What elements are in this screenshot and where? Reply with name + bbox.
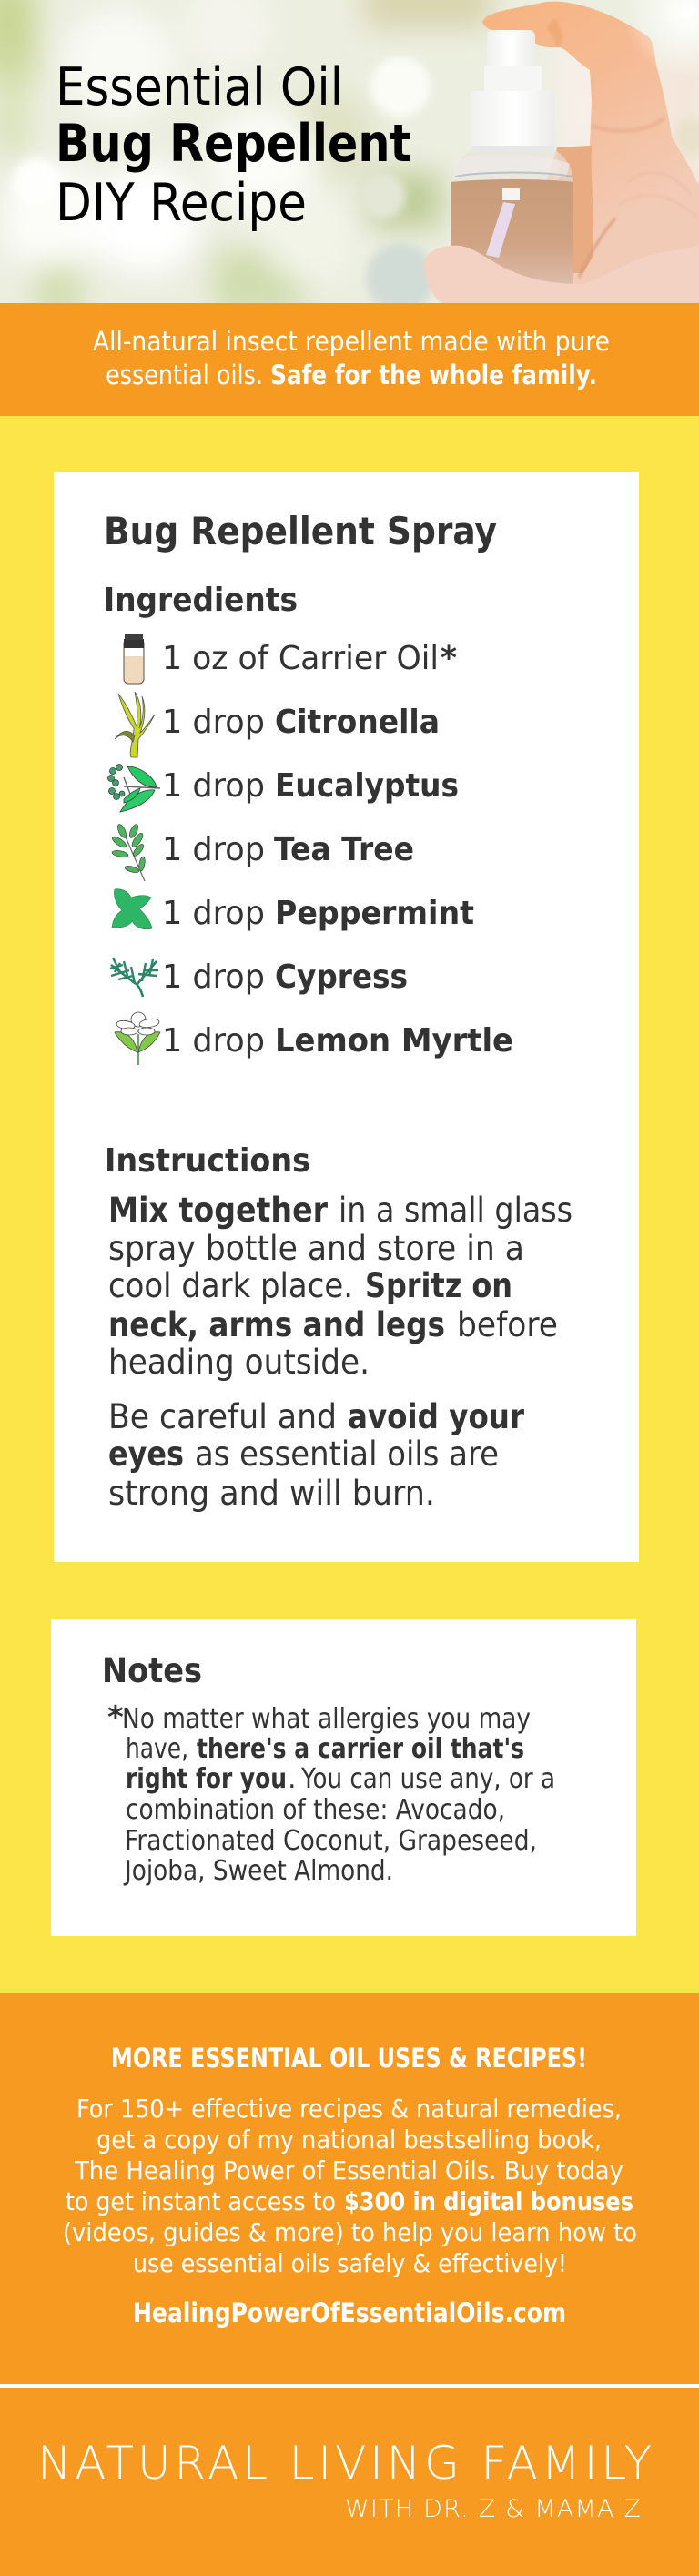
- instructions: mixing paragraph: in a small glass: [339, 1191, 572, 1230]
- footer logo: WITH DR. Z & MAMA Z: [345, 2495, 641, 2523]
- notes body: there's a carrier oil that's: [197, 1733, 524, 1765]
- instructions: mixing paragraph: [108, 1191, 572, 1382]
- instructions: mixing paragraph: before: [457, 1305, 558, 1344]
- ingredient: eucalyptus: 1 drop: [162, 767, 265, 805]
- ingredient: citronella: 1 drop: [162, 704, 265, 741]
- orange intro band: Safe for the whole family.: [270, 360, 597, 390]
- promo body: get a copy of my national bestselling book,: [96, 2125, 602, 2155]
- instructions: mixing paragraph: spray bottle and store in a: [108, 1229, 524, 1268]
- notes body: *: [107, 1699, 124, 1736]
- notes body: combination of these: Avocado,: [126, 1794, 505, 1826]
- icon: tea tree: [111, 823, 146, 881]
- notes body: No matter what allergies you may: [122, 1703, 531, 1735]
- notes body: .: [288, 1763, 297, 1795]
- instructions: mixing paragraph: neck, arms and legs: [108, 1305, 445, 1344]
- promo body: [63, 2094, 637, 2278]
- promo heading: MORE ESSENTIAL OIL USES & RECIPES!: [111, 2043, 587, 2074]
- ingredients heading: Ingredients: [104, 582, 298, 619]
- ingredient: tea tree: Tea Tree: [274, 831, 414, 868]
- instructions: safety paragraph: avoid your: [348, 1397, 525, 1436]
- instructions: mixing paragraph: cool dark place.: [108, 1266, 353, 1305]
- hand behind bottle: [482, 2, 699, 303]
- instructions: safety paragraph: Be careful and: [108, 1397, 337, 1436]
- instructions heading: Instructions: [105, 1142, 310, 1180]
- instructions: safety paragraph: as essential oils are: [195, 1435, 499, 1474]
- ingredient: carrier oil: 1 oz of Carrier Oil: [162, 640, 439, 677]
- instructions: mixing paragraph: Spritz on: [365, 1266, 512, 1305]
- ingredient: eucalyptus: Eucalyptus: [275, 767, 459, 805]
- ingredient: cypress: Cypress: [275, 958, 408, 996]
- instructions: safety paragraph: strong and will burn.: [108, 1474, 435, 1513]
- footer divider: [0, 2384, 699, 2388]
- recipe heading: Bug Repellent Spray: [104, 509, 497, 553]
- footer logo: NATURAL LIVING FAMILY: [37, 2437, 652, 2490]
- orange promo section: [0, 1993, 699, 2576]
- icon: carrier oil bottle: [124, 634, 144, 684]
- title: Essential Oil: [56, 57, 343, 117]
- icon: peppermint: [112, 889, 152, 929]
- thumb: [424, 246, 699, 303]
- ingredient: lemon myrtle: Lemon Myrtle: [275, 1022, 513, 1060]
- instructions: mixing paragraph: heading outside.: [108, 1343, 370, 1382]
- promo body: The Healing Power of Essential Oils. Buy today: [74, 2155, 623, 2186]
- promo body: For 150+ effective recipes & natural remedies,: [76, 2094, 622, 2124]
- hero photo: hand holding spray bottle: [0, 0, 699, 319]
- ingredient: citronella: Citronella: [275, 704, 440, 741]
- icon: citronella: [115, 692, 155, 757]
- notes body: [107, 1699, 555, 1887]
- promo body: use essential oils safely & effectively!: [133, 2248, 567, 2278]
- notes body: You can use any, or a: [300, 1763, 555, 1795]
- notes heading: Notes: [102, 1651, 202, 1690]
- ingredient: peppermint: Peppermint: [275, 895, 474, 932]
- promo body: to get instant access to: [66, 2186, 336, 2216]
- promo body: $300 in digital bonuses: [344, 2186, 633, 2216]
- sun flare: [630, 0, 699, 63]
- orange intro band: All-natural insect repellent made with pure: [93, 326, 610, 357]
- title: Bug Repellent: [56, 114, 411, 174]
- ingredient: lemon myrtle: 1 drop: [162, 1022, 265, 1060]
- instructions: mixing paragraph: Mix together: [108, 1191, 329, 1230]
- icon: eucalyptus: [107, 765, 160, 812]
- title: [56, 57, 411, 233]
- ingredient: tea tree: 1 drop: [162, 831, 265, 868]
- spray bottle: [451, 30, 573, 285]
- panel: recipe card: [54, 472, 639, 1562]
- panel: notes: [51, 1619, 636, 1936]
- notes body: have,: [126, 1733, 188, 1765]
- orange intro band: [0, 303, 699, 416]
- orange intro band: essential oils.: [106, 360, 263, 390]
- instructions: safety paragraph: eyes: [108, 1435, 184, 1474]
- ingredient: carrier oil: *: [441, 640, 457, 677]
- notes body: Fractionated Coconut, Grapeseed,: [125, 1825, 537, 1857]
- promo body: (videos, guides & more) to help you learn how to: [63, 2217, 637, 2247]
- promo link: HealingPowerOfEssentialOils.com: [133, 2297, 566, 2328]
- title: DIY Recipe: [56, 173, 307, 233]
- icon: cypress: [110, 958, 158, 997]
- icon: lemon myrtle: [115, 1012, 160, 1065]
- notes body: right for you: [126, 1763, 287, 1795]
- notes body: Jojoba, Sweet Almond.: [123, 1855, 393, 1887]
- ingredient: peppermint: 1 drop: [162, 895, 265, 932]
- instructions: safety paragraph: [108, 1397, 525, 1513]
- ingredient: cypress: 1 drop: [162, 958, 265, 996]
- footer logo: [37, 2437, 652, 2523]
